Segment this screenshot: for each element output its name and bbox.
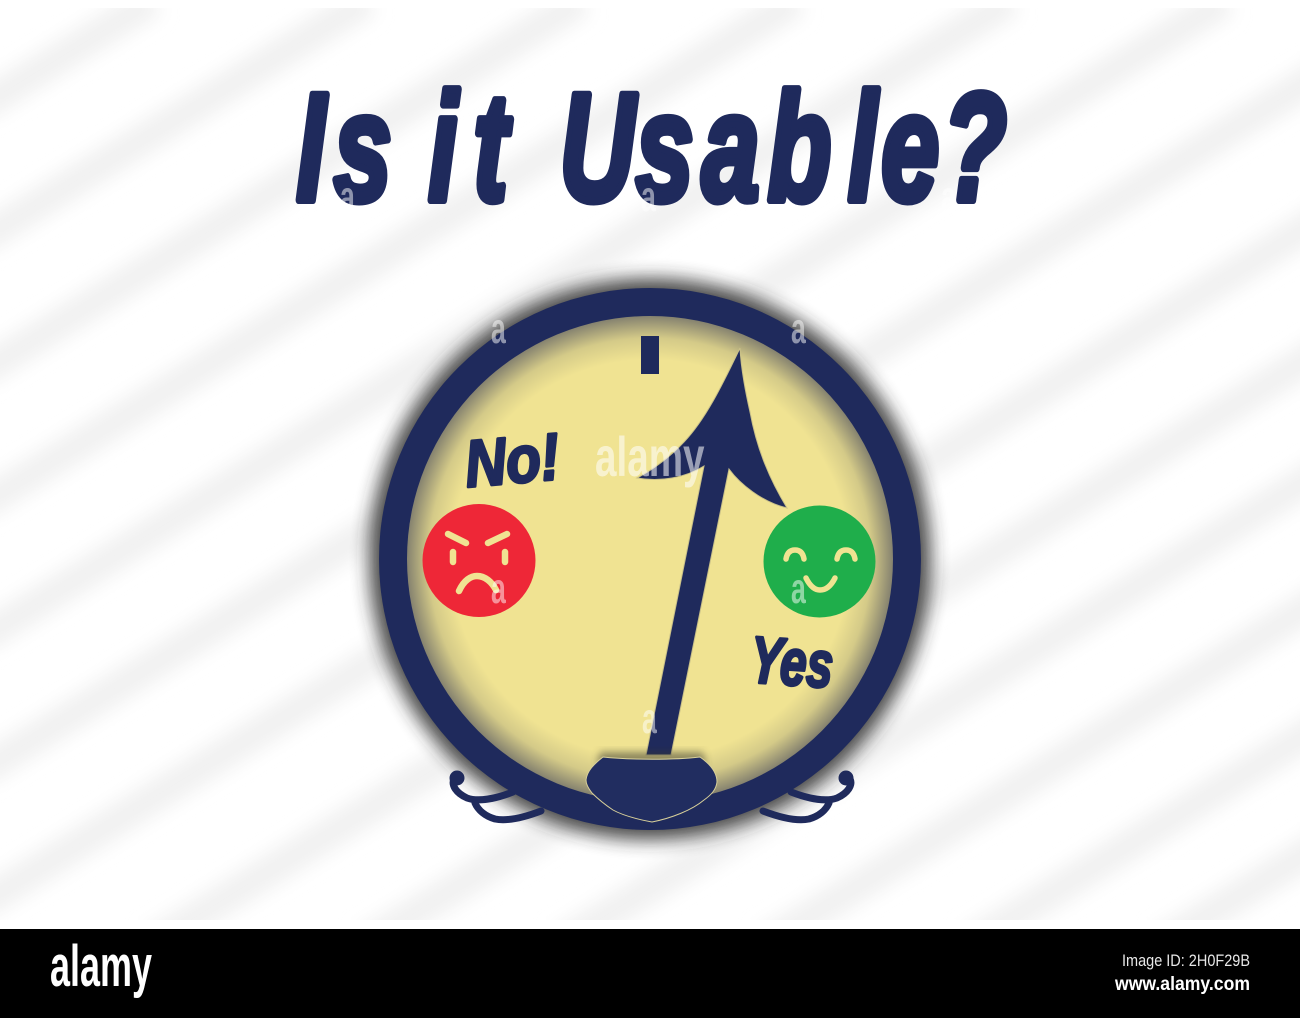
gauge shadow halo	[369, 278, 931, 840]
dial face	[407, 316, 893, 802]
label: Yes: Yes	[748, 624, 836, 703]
hub shadow	[597, 752, 706, 766]
top tick mark	[641, 336, 659, 374]
label: No!: No!	[462, 420, 563, 502]
title: Is it Usable?	[296, 62, 1007, 233]
right feet curls	[763, 774, 851, 820]
footer url: www.alamy.com	[1114, 974, 1250, 995]
footer image id: Image ID: 2H0F29B	[1122, 951, 1250, 970]
footer logo: alamy: alamy	[50, 934, 152, 999]
watermark: small a marks: a	[491, 305, 507, 353]
outer ring	[379, 288, 921, 830]
gauge	[369, 278, 931, 840]
watermark: small a marks	[340, 173, 957, 743]
needle hub	[586, 757, 717, 822]
watermark: alamy centre: alamy	[595, 426, 705, 489]
footer bar	[0, 929, 1300, 1018]
watermark: small a marks: a	[641, 173, 657, 221]
green happy face	[764, 506, 876, 618]
watermark: small a marks: a	[491, 565, 507, 613]
watermark: small a marks: a	[941, 173, 957, 221]
needle arrow	[637, 348, 787, 755]
watermark: small a marks: a	[642, 695, 658, 743]
red angry face	[422, 504, 536, 617]
watermark: small a marks: a	[340, 173, 356, 221]
watermark: small a marks: a	[791, 305, 807, 353]
watermark: small a marks: a	[791, 565, 807, 613]
left feet curls	[453, 774, 541, 820]
